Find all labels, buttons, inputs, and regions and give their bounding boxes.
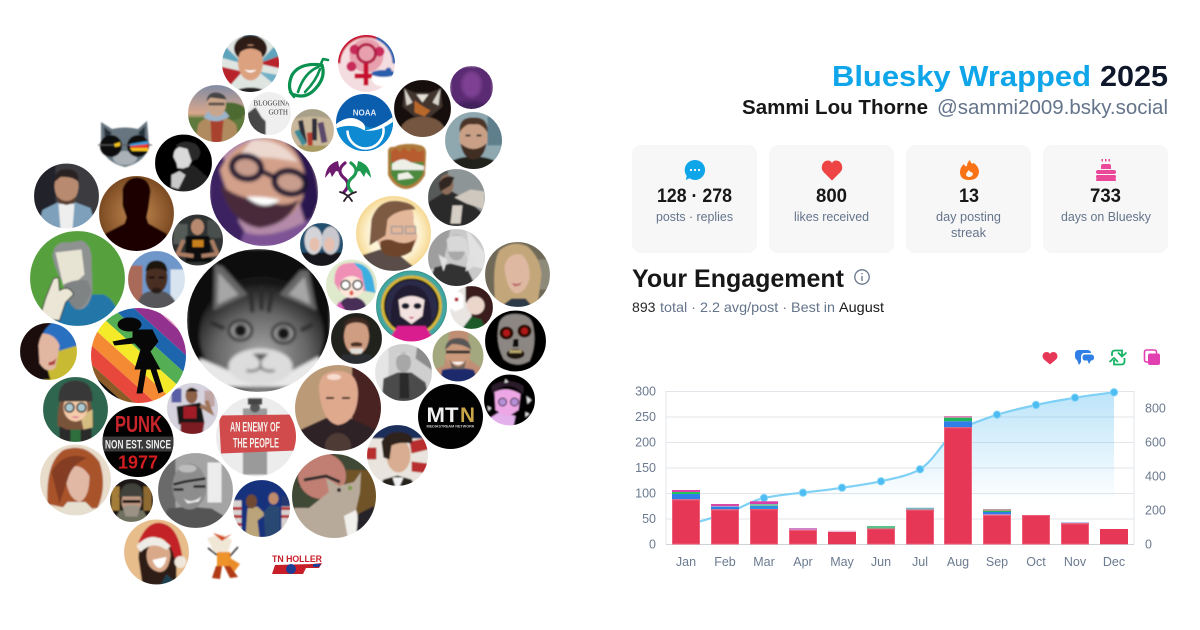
- avatar: black and white speaker: [374, 344, 432, 402]
- month labels: Mar: [753, 555, 775, 569]
- month labels: Aug: [947, 555, 969, 569]
- avatar: young man with American flag: [366, 424, 428, 486]
- avatar: man in light blue jacket: [34, 163, 100, 229]
- avatar: man reclining in dark clothes: [428, 168, 486, 226]
- avatar: smiling man with glasses in blue: [432, 330, 484, 382]
- avatar: man with beard, cream background: [356, 196, 432, 272]
- right axis labels: 200: [1145, 504, 1166, 518]
- left axis labels: 200: [635, 436, 656, 450]
- avatar: tabby cat in greyscale: [186, 248, 330, 392]
- month labels: Jan: [676, 555, 696, 569]
- avatar: cartoon fox character: [207, 533, 240, 579]
- engagement summary: total · 2.2 avg/post · Best in: [660, 299, 835, 315]
- avatar: An Enemy of the People poster: AN ENEMY OF: [230, 418, 280, 434]
- month labels: Feb: [714, 555, 736, 569]
- avatar: NOAA logo: NOAA: [353, 108, 376, 118]
- month labels: [676, 555, 1125, 569]
- panel: likes received: likes received: [794, 209, 869, 224]
- avatar: green and orange forest patch: [388, 144, 426, 189]
- icon: replies bubbles: [1075, 350, 1094, 365]
- left axis labels: 0: [649, 538, 656, 552]
- avatar: green onion logo: [290, 59, 328, 97]
- avatar: anime character with mask: [450, 286, 494, 330]
- month labels: Nov: [1064, 555, 1087, 569]
- bar: Apr: [789, 528, 817, 544]
- month labels: Sep: [986, 555, 1008, 569]
- bar: Jul: [906, 508, 934, 544]
- avatar: TN Holler logo: TN HOLLER: [272, 554, 322, 565]
- icon: heart: [822, 160, 842, 180]
- avatar: TN Holler logo: [272, 554, 322, 574]
- stacked bars: [672, 416, 1128, 544]
- panel: days on Bluesky: 733: [1090, 186, 1121, 207]
- avatar: anime girl with pink and blue hair: [326, 259, 378, 311]
- avatar: dragons emblem: [325, 161, 371, 201]
- avatar: MTN logo: MEDIASTREAM NETWORK: [426, 424, 475, 428]
- avatar: man in black shirt with orange print: [172, 214, 224, 266]
- avatar: black and white profile portrait: [154, 134, 212, 192]
- month labels: Jun: [871, 555, 891, 569]
- avatar: two figures at flags: [232, 480, 290, 538]
- bar: Jan: [672, 490, 700, 544]
- right axis labels: [1145, 402, 1166, 552]
- panel: posting streak: day posting: [936, 209, 1001, 224]
- engagement summary: August: [839, 299, 884, 315]
- bar: Mar: [750, 501, 778, 544]
- avatar: dark silhouette on brown: [98, 176, 174, 254]
- month labels: Jul: [912, 555, 928, 569]
- user name and handle: @sammi2009.bsky.social: [937, 97, 1168, 119]
- avatar: cartoon thinking bearded man on green: [30, 230, 126, 326]
- avatar: large smiling man with glasses, purple cast: [209, 137, 319, 247]
- user name and handle: Sammi Lou Thorne: [742, 97, 928, 119]
- bar: Jun: [867, 526, 895, 544]
- user name and handle: [742, 97, 1168, 119]
- icon: speech bubble: [685, 160, 705, 180]
- avatar: bald man with glasses in greyscale: [158, 452, 234, 528]
- chart legend icons: [1043, 350, 1160, 365]
- icon: quotes squares: [1144, 350, 1160, 365]
- bar: Nov: [1061, 522, 1089, 544]
- panel: posts and replies: 128 · 278: [657, 186, 732, 207]
- bar: Dec: [1100, 529, 1128, 544]
- avatar: Blogging Goth: BLOGGINA: [254, 100, 290, 108]
- avatar: man in cap with grey beard: [110, 478, 154, 522]
- avatar: two drag performers: [300, 222, 344, 266]
- avatar: Punk 1977 logo: PUNK: [115, 411, 162, 437]
- avatar: Blogging Goth: GOTH: [268, 108, 288, 116]
- avatar: An Enemy of the People poster: THE PEOPLE: [233, 434, 279, 450]
- avatar: cat with rainbow glasses: [98, 121, 152, 167]
- avatar: man in printed t-shirt mirror selfie: [166, 382, 218, 434]
- month labels: May: [830, 555, 855, 569]
- avatar: bearded man: [445, 112, 502, 169]
- left axis labels: 150: [635, 461, 656, 475]
- panel: posts and replies: [632, 145, 757, 253]
- panel: posts and replies: posts · replies: [656, 209, 733, 224]
- left axis labels: 300: [635, 384, 656, 398]
- avatar: pink floral fist badge: [338, 34, 396, 92]
- avatar: smiling man on dark background: [330, 312, 382, 364]
- panel: posting streak: streak: [951, 225, 986, 240]
- left axis labels: 250: [635, 410, 656, 424]
- avatar: black and white person with raised hands: [428, 228, 486, 288]
- cumulative points: [760, 389, 1118, 502]
- avatar: pale demon face: [484, 310, 546, 372]
- avatar: woman on red and blue rays: [222, 35, 279, 92]
- panel: days on Bluesky: days on Bluesky: [1061, 209, 1151, 224]
- avatar: bitmoji with beanie and glasses: [42, 376, 108, 442]
- avatar: NOAA logo: [336, 94, 394, 152]
- avatar: Punk 1977 logo: [102, 406, 174, 478]
- panel: likes received: 800: [816, 186, 847, 207]
- avatar: blonde woman: [484, 242, 550, 308]
- left axis labels: 50: [642, 512, 656, 526]
- panel: posting streak: 13: [959, 186, 979, 207]
- avatar: illustrated dark haired girl on rainbow: [376, 270, 448, 342]
- right axis labels: 0: [1145, 538, 1152, 552]
- right axis labels: 800: [1145, 402, 1166, 416]
- bar: Feb: [711, 504, 739, 544]
- avatar: anime girl in pink on black: [484, 374, 536, 426]
- avatar bubble cluster: [20, 34, 550, 585]
- avatar: Punk 1977 logo: 1977: [118, 452, 158, 472]
- bar: Sep: [983, 509, 1011, 544]
- avatar: colorful horses painting: [290, 108, 334, 152]
- month labels: Apr: [793, 555, 813, 569]
- icon: likes heart: [1043, 352, 1057, 364]
- bar: Oct: [1022, 515, 1050, 544]
- avatar: woman with Ukraine flag: [20, 322, 78, 380]
- engagement summary: 893: [632, 299, 656, 315]
- cumulative line: [686, 392, 1114, 526]
- avatar: Blogging Goth: [248, 92, 292, 136]
- panel: likes received: [769, 145, 894, 253]
- panel: posting streak: [906, 145, 1031, 253]
- bar: May: [828, 531, 856, 544]
- icon: flame: [960, 160, 979, 180]
- heading: your engagement: Your Engagement: [632, 265, 845, 293]
- avatar: MTN logo: N: [460, 404, 475, 427]
- grid lines: [666, 391, 1134, 544]
- avatar: man with glasses in a field: [188, 84, 246, 144]
- month labels: Dec: [1103, 555, 1125, 569]
- avatar: purple tinted portrait: [450, 66, 493, 109]
- engagement summary: [632, 299, 884, 315]
- panel: days on Bluesky: [1043, 145, 1168, 253]
- right axis labels: 400: [1145, 470, 1166, 484]
- bar: Aug: [944, 416, 972, 544]
- icon: info: [855, 270, 869, 284]
- left axis labels: [635, 384, 656, 552]
- avatar: MTN logo: [418, 384, 484, 450]
- month labels: Oct: [1026, 555, 1046, 569]
- avatar: red panda: [394, 80, 451, 137]
- icon: cake: [1096, 159, 1116, 181]
- title: Bluesky Wrapped: [832, 61, 1091, 93]
- cumulative area: [686, 392, 1114, 544]
- avatar: bald man with microphone: [295, 365, 381, 451]
- avatar: man taking selfie: [128, 250, 186, 310]
- title: 2025: [1100, 61, 1168, 93]
- avatar: MTN logo: MT: [426, 404, 459, 427]
- avatar: laughing woman in Santa hat: [124, 519, 190, 585]
- avatar: red haired woman: [40, 444, 112, 516]
- avatar: An Enemy of the People poster: [216, 396, 296, 476]
- right axis labels: 600: [1145, 436, 1166, 450]
- avatar: man holding a cat: [291, 453, 378, 539]
- line and bar chart: [635, 384, 1166, 569]
- left axis labels: 100: [635, 486, 656, 500]
- avatar: rainbow flag with black silhouette woman: [91, 308, 186, 403]
- icon: repost arrows: [1110, 350, 1126, 364]
- avatar: Punk 1977 logo: NON EST. SINCE: [105, 438, 171, 452]
